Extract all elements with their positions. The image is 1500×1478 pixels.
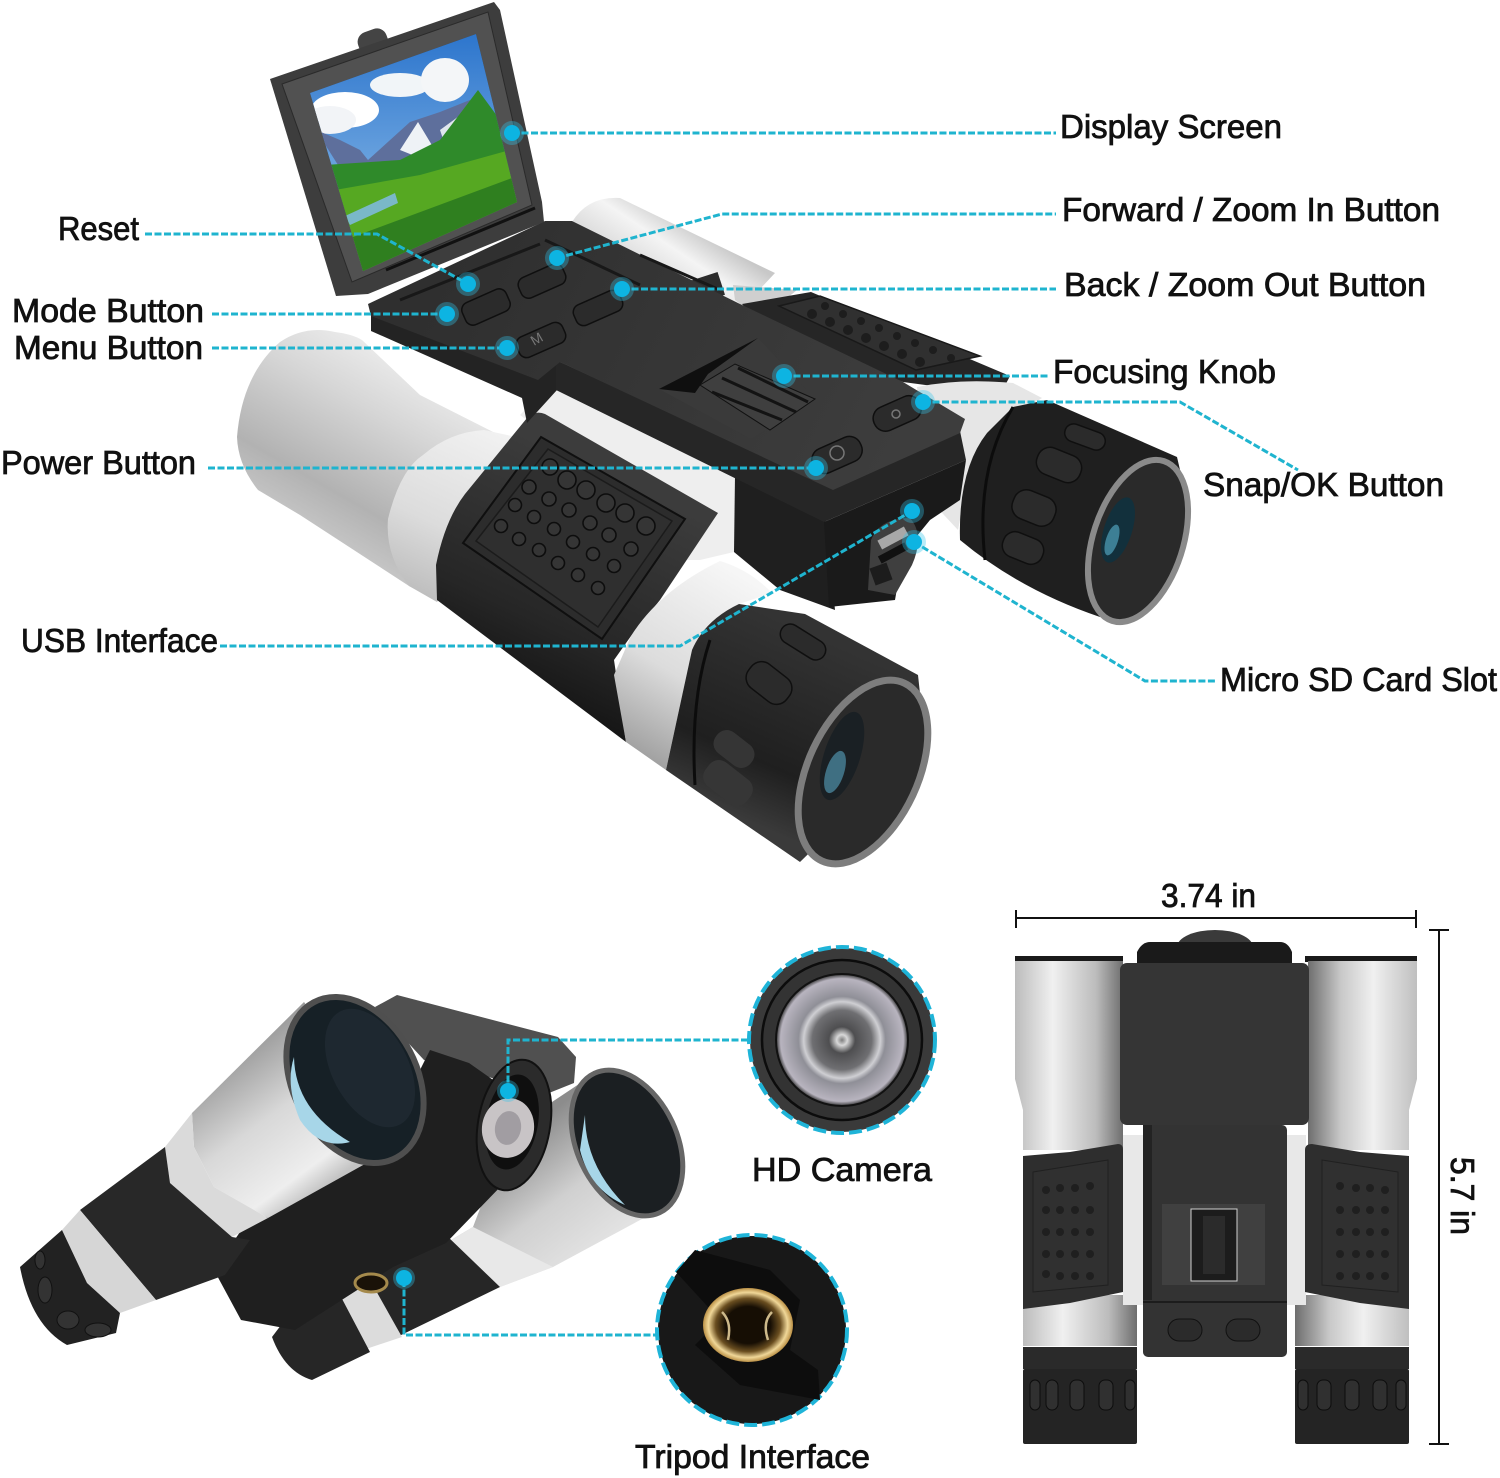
buttons: [459, 261, 925, 477]
callout: Mode Button: [12, 292, 459, 329]
width dimension: 3.74 in: 3.74 in: [1161, 877, 1256, 914]
callout: Power Button: Power Button: [1, 444, 196, 481]
top view of binoculars: [1015, 930, 1417, 1444]
callout: Tripod Interface: [393, 1235, 870, 1475]
callout: Menu Button: [14, 329, 519, 366]
callout: Display Screen: Display Screen: [1060, 108, 1282, 145]
width dimension: 3.74 in: [1016, 877, 1416, 928]
callout: Reset: [58, 210, 480, 296]
flip screen back: [375, 995, 576, 1093]
callout: Power Button: [1, 444, 828, 481]
central body with camera: [214, 1050, 561, 1330]
display screen: [270, 2, 544, 296]
right barrel: [1287, 956, 1417, 1444]
focusing knob: [659, 338, 815, 439]
rear barrel: [572, 198, 1207, 635]
callout: Micro SD Card Slot: [902, 530, 1497, 698]
camera body: [270, 2, 966, 607]
callout: Forward / Zoom In Button: [545, 191, 1440, 270]
callout: Reset: Reset: [58, 210, 139, 247]
callout: Menu Button: Menu Button: [14, 329, 203, 366]
callout: Snap/OK Button: Snap/OK Button: [1203, 466, 1444, 503]
main binoculars product photo: [237, 2, 1207, 884]
callout: Forward / Zoom In Button: Forward / Zoom In Button: [1062, 191, 1440, 228]
callout: Focusing Knob: [772, 353, 1276, 390]
label: Tripod Interface: [635, 1438, 870, 1475]
lower-left binoculars underside view: [20, 973, 705, 1380]
height dimension: 5.7 in: [1429, 930, 1481, 1444]
height dimension: 5.7 in: 5.7 in: [1444, 1157, 1481, 1235]
left barrel: [1015, 956, 1143, 1444]
front barrel: [237, 330, 954, 884]
callout: HD Camera: [497, 947, 935, 1188]
callout: Mode Button: Mode Button: [12, 292, 204, 329]
callout: Back / Zoom Out Button: [610, 266, 1426, 303]
first barrel: [20, 973, 451, 1345]
callout: Micro SD Card Slot: Micro SD Card Slot: [1220, 661, 1497, 698]
callout: Snap/OK Button: [911, 390, 1444, 503]
buttons: M: [528, 329, 546, 349]
callout: Display Screen: [500, 108, 1282, 145]
callout: Back / Zoom Out Button: Back / Zoom Out Button: [1064, 266, 1426, 303]
callout: USB Interface: [21, 499, 924, 659]
second barrel: [272, 1052, 705, 1380]
callout: USB Interface: USB Interface: [21, 622, 218, 659]
callout: Focusing Knob: Focusing Knob: [1053, 353, 1276, 390]
central body: [1120, 930, 1309, 1357]
label: HD Camera: [752, 1151, 933, 1188]
